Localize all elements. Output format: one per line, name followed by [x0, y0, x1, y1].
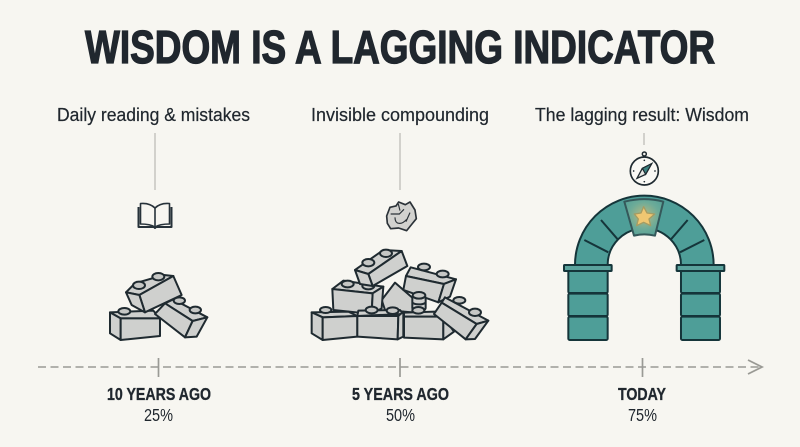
heading: invisible compounding: Invisible compounding [311, 105, 489, 125]
icon: open book [138, 203, 172, 228]
label: today: TODAY [618, 384, 666, 404]
label: 10 years ago: 25% [144, 405, 173, 425]
small brick pile [110, 273, 207, 340]
label: today: 75% [628, 405, 657, 425]
connector lines [155, 133, 644, 190]
brick: middle back [382, 283, 415, 313]
brick: second row left [332, 281, 383, 314]
large brick pile [312, 250, 488, 340]
brick: upper right [403, 264, 456, 302]
brick: right [434, 297, 488, 339]
icon: compass [630, 152, 658, 185]
heading: lagging result: The lagging result: Wisdom [535, 105, 749, 125]
left column [564, 265, 612, 340]
keystone [624, 199, 663, 236]
brick: upright stud stack [412, 292, 426, 310]
label: 5 years ago: 5 YEARS AGO [352, 384, 449, 404]
arch [564, 196, 724, 340]
label: 10 years ago [107, 384, 211, 425]
label: today [618, 384, 666, 425]
brick: bottom left [312, 307, 357, 340]
right column [677, 265, 724, 340]
heading: daily reading: Daily reading & mistakes [57, 105, 250, 125]
brick: bottom middle [357, 307, 403, 339]
brick: top [126, 273, 182, 312]
brick: top of pile [355, 250, 407, 286]
timeline arrow [38, 358, 762, 377]
brick: bottom right [404, 307, 454, 339]
label: 10 years ago: 10 YEARS AGO [107, 384, 211, 404]
label: 5 years ago: 50% [386, 405, 415, 425]
label: 5 years ago [352, 384, 449, 425]
icon: crumpled paper [387, 202, 416, 231]
brick: bottom left [110, 308, 160, 340]
arch ring [575, 196, 714, 265]
brick: right [155, 297, 207, 337]
icon: star [634, 207, 655, 226]
